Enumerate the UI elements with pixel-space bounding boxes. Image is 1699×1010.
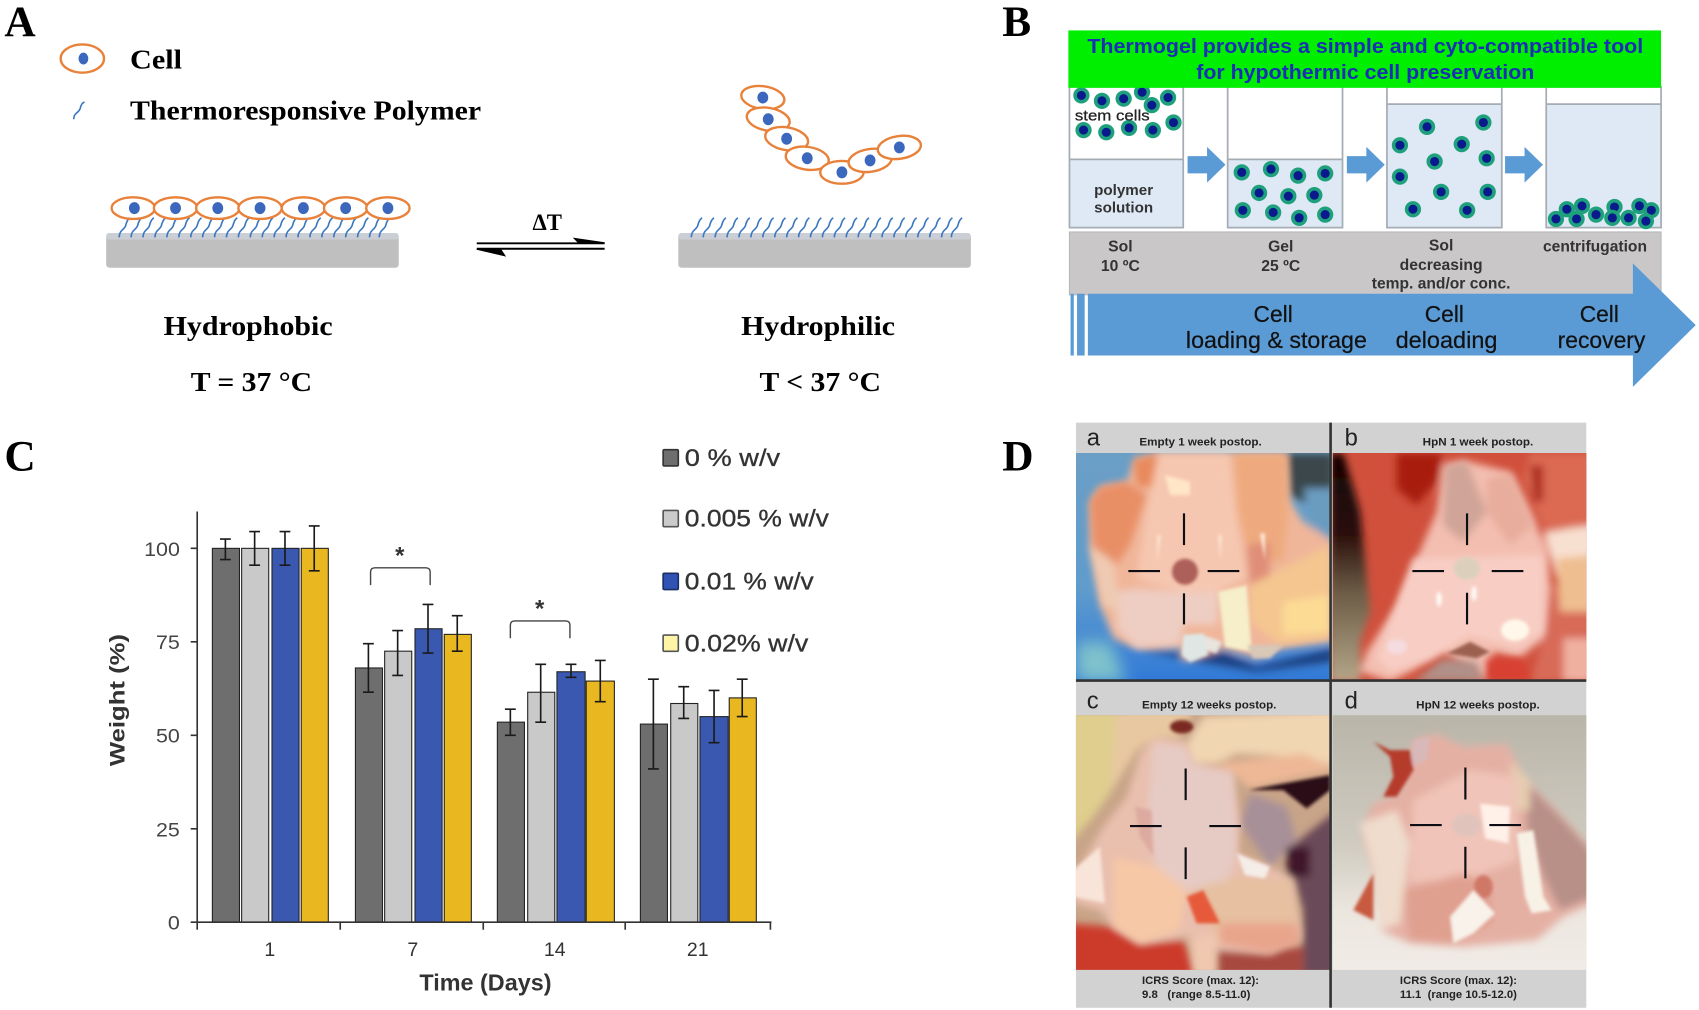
label: T < 37 C: T < 37 °C bbox=[760, 367, 881, 397]
grey condition band: temp. and/or conc. bbox=[1372, 275, 1510, 292]
x axis tick labels bbox=[264, 939, 709, 961]
y axis tick labels bbox=[144, 539, 180, 935]
x axis tick labels: 21 bbox=[687, 939, 709, 961]
legend: 0.01 % w/v bbox=[685, 569, 814, 596]
title banner: for hypothermic cell preservation bbox=[1196, 62, 1534, 84]
photo a: empty 1 week bbox=[1076, 453, 1330, 680]
y axis tick labels: 0 bbox=[168, 913, 180, 935]
photo captions: b bbox=[1345, 424, 1358, 451]
hydrophobic surface with attached cells bbox=[106, 197, 410, 268]
blue timeline arrow bbox=[1071, 263, 1696, 387]
grey condition band: 25 ºC bbox=[1261, 258, 1300, 275]
beaker 1: stem cells over polymer solution: solution bbox=[1094, 199, 1153, 216]
significance bracket: day 14 bbox=[510, 596, 570, 638]
blue timeline arrow: Cell bbox=[1580, 301, 1619, 327]
beaker 1: stem cells over polymer solution bbox=[1069, 84, 1183, 228]
grey condition band: Gel bbox=[1268, 238, 1293, 255]
equilibrium arrows with delta T bbox=[477, 210, 605, 256]
panel C: weight bar chart bbox=[4, 432, 829, 995]
panel letter D: D bbox=[1002, 432, 1034, 480]
photo captions: d bbox=[1345, 688, 1358, 715]
beaker 1: stem cells over polymer solution: polymer bbox=[1094, 182, 1153, 199]
photo captions: HpN 12 weeks postop. bbox=[1416, 700, 1540, 712]
photo captions: c bbox=[1087, 688, 1099, 715]
panel A: thermoresponsive cell sheet bbox=[4, 0, 971, 397]
grey condition band: decreasing bbox=[1400, 257, 1483, 274]
label: T = 37 C: T = 37 °C bbox=[191, 367, 312, 397]
x axis title: Time (Days) bbox=[419, 969, 552, 995]
blue timeline arrow: deloading bbox=[1396, 327, 1497, 353]
photo captions: 11.1 (range 10.5-12.0) bbox=[1400, 989, 1517, 1001]
label: hydrophilic: Hydrophilic bbox=[741, 311, 895, 341]
y axis title: Weight (%) bbox=[105, 634, 130, 766]
panel letter C: C bbox=[4, 432, 36, 480]
error bars bbox=[220, 526, 748, 769]
photo captions: Empty 1 week postop. bbox=[1139, 436, 1262, 448]
panel D: cartilage photos bbox=[1002, 423, 1593, 1008]
beaker 2: gel bbox=[1228, 87, 1343, 228]
beaker 3: sol bbox=[1387, 87, 1502, 228]
blue timeline arrow: recovery bbox=[1558, 327, 1646, 353]
photo captions: ICRS Score (max. 12): bbox=[1142, 975, 1259, 987]
y axis tick labels: 100 bbox=[144, 539, 180, 561]
grey backing bbox=[1076, 423, 1586, 1008]
legend: cell bbox=[61, 44, 183, 74]
photo captions bbox=[1087, 424, 1540, 1001]
legend: 0 % w/v bbox=[685, 445, 780, 472]
grey condition band: centrifugation bbox=[1543, 238, 1647, 255]
grey condition band: Sol bbox=[1429, 237, 1453, 254]
photo b: HpN 1 week bbox=[1330, 445, 1593, 685]
photo captions: Empty 12 weeks postop. bbox=[1142, 700, 1276, 712]
blue timeline arrow: loading & storage bbox=[1186, 327, 1367, 353]
grey condition band bbox=[1069, 232, 1661, 295]
significance bracket: day 7: * bbox=[395, 543, 405, 570]
legend bbox=[663, 445, 829, 657]
beaker 4: centrifuged cells bbox=[1546, 87, 1661, 229]
x axis tick labels: 14 bbox=[544, 939, 566, 961]
legend: cell: Cell bbox=[130, 44, 183, 74]
grey condition band: Sol bbox=[1108, 238, 1133, 255]
beaker 1: stem cells over polymer solution: stem cells bbox=[1075, 107, 1150, 124]
legend: 0.005 % w/v bbox=[685, 506, 829, 533]
label: hydrophobic: Hydrophobic bbox=[164, 311, 333, 341]
detached cell sheet bbox=[740, 83, 922, 184]
significance bracket: day 14: * bbox=[535, 596, 545, 623]
grey condition band: 10 ºC bbox=[1101, 258, 1140, 275]
blue timeline arrow: Cell bbox=[1425, 301, 1464, 327]
y axis tick labels: 50 bbox=[156, 725, 180, 747]
axes bbox=[191, 512, 771, 930]
photo captions: a bbox=[1087, 424, 1101, 451]
dividers between photos bbox=[1076, 423, 1586, 1008]
legend: thermoresponsive polymer: Thermoresponsive Polymer bbox=[130, 95, 481, 125]
legend: 0.02% w/v bbox=[685, 630, 808, 657]
y axis tick labels: 75 bbox=[156, 632, 180, 654]
title banner: Thermogel provides a simple and cyto-compatible tool bbox=[1087, 36, 1643, 58]
photo captions: 9.8 (range 8.5-11.0) bbox=[1142, 989, 1251, 1001]
photo captions: ICRS Score (max. 12): bbox=[1400, 975, 1517, 987]
photo d: HpN 12 weeks bbox=[1330, 710, 1593, 977]
hydrophilic surface with free polymer bbox=[678, 218, 971, 268]
title banner bbox=[1068, 30, 1661, 88]
bars bbox=[212, 548, 756, 922]
blue timeline arrow: Cell bbox=[1254, 301, 1293, 327]
panel B: thermogel workflow bbox=[1002, 0, 1696, 387]
x axis tick labels: 1 bbox=[264, 939, 275, 961]
process arrows bbox=[1188, 147, 1543, 183]
y axis tick labels: 25 bbox=[156, 820, 180, 842]
photo c: empty 12 weeks bbox=[1070, 710, 1337, 977]
significance bracket: day 7 bbox=[371, 543, 430, 585]
x axis tick labels: 7 bbox=[407, 939, 418, 961]
equilibrium arrows with delta T: ΔT bbox=[532, 210, 562, 235]
beakers bbox=[1069, 84, 1661, 229]
photo captions: HpN 1 week postop. bbox=[1423, 436, 1533, 448]
